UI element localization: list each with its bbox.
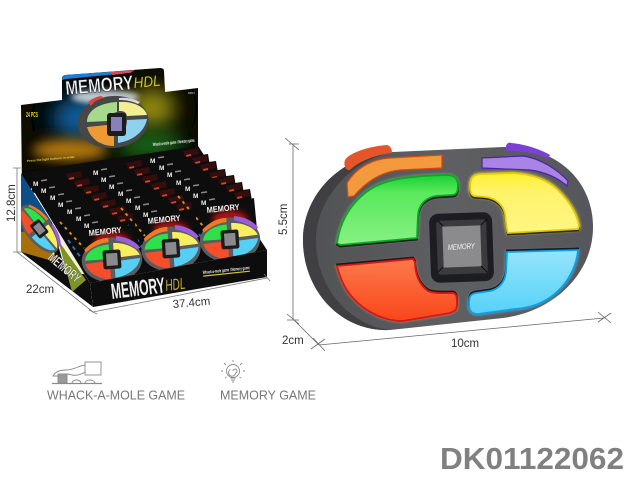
label: memory game: MEMORY GAME: [220, 388, 316, 402]
button: blue: [469, 248, 578, 314]
product dimension lines: [285, 138, 611, 351]
icon: memory bulb: [221, 360, 245, 382]
label: 22cm: 22cm: [26, 284, 54, 296]
front strip with logo: HDL: [164, 276, 186, 295]
label: 10cm: 10cm: [451, 338, 479, 350]
label: 2cm: 2cm: [282, 335, 304, 347]
label: 24 pcs: 24 PCS: [26, 112, 38, 119]
back panel captions: Whack-a-mole game / Memory game: [153, 138, 195, 147]
box dimension lines: [13, 168, 270, 314]
cap: orange side button: [344, 145, 392, 170]
toy column 2: [140, 211, 202, 273]
logo: MEMORY HDL: HDL: [133, 73, 161, 92]
toy column 3: [198, 198, 262, 264]
rows of packaged toys: [32, 147, 252, 262]
label: 37.4cm: 37.4cm: [172, 296, 211, 311]
product code: DK01122062: [440, 441, 624, 476]
product: memory game toy: [303, 143, 593, 330]
button: green: [337, 175, 458, 246]
logo: MEMORY HDL: MEMORY: [65, 72, 135, 100]
left side wall: [21, 173, 93, 307]
panel: box back with logo: [21, 68, 198, 188]
back panel captions: 8801: [188, 91, 195, 95]
button: yellow: [470, 173, 579, 234]
center logo text: MEMORY: [448, 242, 476, 252]
back panel captions: [27, 91, 195, 163]
label: 5.5cm: 5.5cm: [278, 204, 290, 235]
side wall logo: MEMORY: [45, 249, 85, 286]
front cards with toys: [80, 198, 262, 284]
box interior: [22, 146, 267, 283]
cap: purple side button: [506, 143, 550, 159]
front strip with logo: [90, 250, 267, 307]
front strip with logo: MEMORY: [110, 273, 166, 304]
purple bar: [482, 156, 568, 186]
center button: [429, 212, 494, 283]
label: whack-a-mole game: WHACK-A-MOLE GAME: [47, 388, 185, 402]
front strip with logo: Whack-a-mole game / Memory game: [203, 265, 250, 275]
icon: whack-a-mole hand: [52, 362, 102, 384]
toy column 1: MEMORY: [88, 225, 122, 238]
label: 12.8cm: 12.8cm: [6, 184, 18, 222]
toy column 2: MEMORY: [147, 213, 181, 226]
display box: [11, 60, 267, 307]
back panel product image: [75, 93, 151, 151]
button: red: [337, 258, 457, 321]
toy column 1: [80, 224, 144, 284]
toy column 3: MEMORY: [206, 202, 240, 215]
orange bar: [347, 155, 442, 197]
device body: [303, 147, 593, 330]
back panel captions: Press the light buttons in order: [27, 155, 76, 163]
